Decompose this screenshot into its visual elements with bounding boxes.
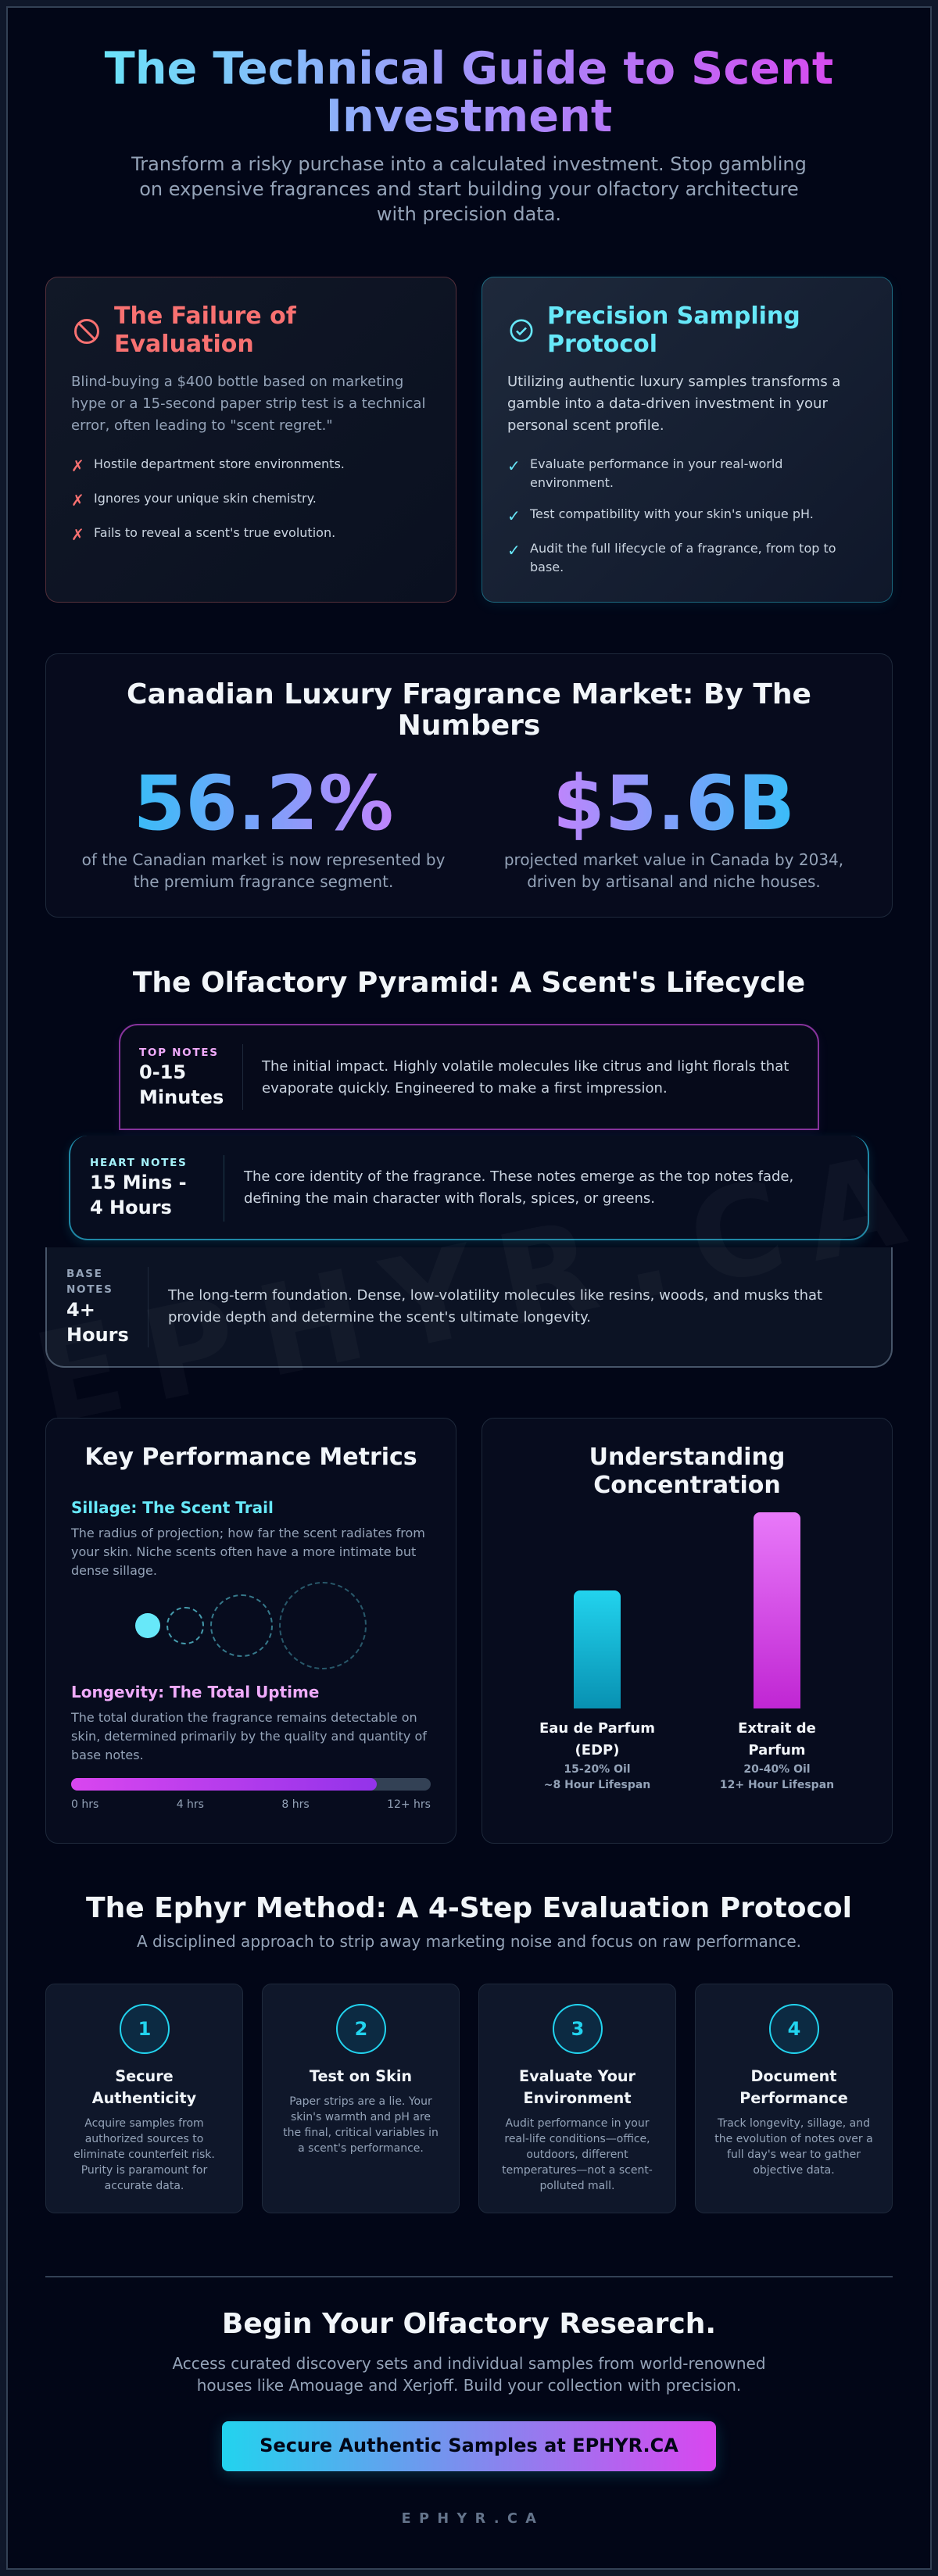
body text: Blind-buying a $400 bottle based on marketing — [71, 374, 403, 390]
stat: $5.6B — [504, 760, 843, 891]
body text: Utilizing authentic luxury samples transforms a — [507, 374, 840, 390]
title: Test on Skin — [310, 2067, 412, 2085]
title — [519, 2067, 635, 2107]
heading — [589, 1444, 785, 1499]
stat: 56.2% — [82, 760, 445, 891]
label: EDP — [539, 1720, 655, 1791]
number: 4 — [788, 2018, 800, 2040]
duration: 4+ — [66, 1299, 95, 1321]
duration — [90, 1172, 187, 1218]
description: skin's warmth and pH are — [291, 2111, 431, 2123]
title: Investment — [326, 89, 612, 142]
number — [769, 2004, 819, 2054]
cta text: Access curated discovery sets and individual samples from world-renowned — [172, 2354, 766, 2373]
description: eliminate counterfeit risk. — [73, 2148, 215, 2161]
sillage text: The radius of projection; how far the scent radiates from — [71, 1526, 425, 1540]
duration: 15 Mins - — [90, 1172, 187, 1193]
description: defining the main character with florals, spices, or greens. — [244, 1190, 655, 1207]
list: benefits: ✓ — [507, 456, 521, 475]
label: EDP: 15-20% Oil — [564, 1763, 631, 1776]
cta button: Secure Authentic Samples at EPHYR.CA — [260, 2435, 678, 2456]
title: The Technical Guide to Scent — [105, 42, 833, 95]
description — [261, 1058, 789, 1097]
step 2 — [262, 1984, 460, 2213]
duration: Hours — [66, 1324, 129, 1346]
body text — [71, 374, 425, 434]
duration: 4 Hours — [90, 1197, 172, 1218]
heading — [547, 302, 800, 358]
sillage text — [70, 1526, 425, 1578]
heading: Understanding — [589, 1444, 785, 1471]
title: Environment — [524, 2089, 632, 2107]
list: benefits: ✓ — [507, 541, 521, 560]
title: Evaluate Your — [519, 2067, 635, 2085]
description — [502, 2117, 653, 2192]
description: evaporate quickly. Engineered to make a first impression. — [262, 1080, 668, 1097]
icon: check circle — [510, 319, 533, 342]
label — [66, 1268, 113, 1296]
list: failures: Fails to reveal a scent's true evolution. — [94, 525, 335, 540]
list: benefits: Test compatibility with your skin's unique pH. — [530, 506, 814, 521]
title: Performance — [739, 2089, 848, 2107]
sillage diagram — [135, 1582, 367, 1669]
panel: understanding concentration — [482, 1418, 893, 1844]
subtitle: on expensive fragrances and start building your olfactory architecture — [139, 178, 799, 200]
list: benefits: ✓ — [507, 506, 521, 525]
subtitle — [131, 153, 807, 225]
heading: Key Performance Metrics — [84, 1444, 417, 1471]
panel: market numbers — [45, 653, 893, 918]
list: failures: ✗ — [71, 456, 84, 475]
stat: 56.2%: 56.2% — [133, 760, 394, 847]
label: Extrait — [720, 1720, 834, 1791]
number — [336, 2004, 386, 2054]
label: Extrait: Parfum — [748, 1742, 806, 1758]
description: the final, critical variables in — [283, 2127, 439, 2139]
label: Extrait: 20-40% Oil — [743, 1763, 811, 1776]
sillage text: dense sillage. — [71, 1563, 157, 1578]
stat: 56.2%: of the Canadian market is now represented by — [82, 850, 445, 869]
description: Track longevity, sillage, and — [718, 2117, 870, 2130]
description: authorized sources to — [85, 2133, 203, 2145]
list: failures: ✗ — [71, 525, 84, 544]
duration — [139, 1061, 224, 1108]
footer brand: EPHYR.CA — [402, 2511, 544, 2527]
description: outdoors, different — [526, 2148, 628, 2161]
description: The initial impact. Highly volatile molecules like citrus and light florals that — [262, 1058, 789, 1075]
description: temperatures—not a scent- — [502, 2164, 653, 2177]
longevity text: The total duration the fragrance remains detectable on — [71, 1710, 417, 1725]
description: objective data. — [753, 2164, 835, 2177]
bar scale: 0 hrs — [71, 1798, 98, 1811]
panel: precision sampling protocol — [482, 277, 893, 603]
pyramid tier: base notes — [45, 1247, 893, 1368]
label: BASE — [66, 1268, 103, 1280]
description — [714, 2117, 873, 2177]
number — [553, 2004, 603, 2054]
stat: $5.6B: driven by artisanal and niche houses. — [527, 872, 821, 891]
icon: prohibited — [74, 319, 99, 344]
duration: Minutes — [139, 1086, 224, 1108]
number: 2 — [355, 2018, 367, 2040]
longevity bar — [71, 1778, 431, 1791]
title: Document — [750, 2067, 836, 2085]
stat: $5.6B: projected market value in Canada by 2034, — [504, 850, 843, 869]
longevity text — [70, 1710, 427, 1762]
label: EDP: ~8 Hour Lifespan — [544, 1779, 650, 1791]
title — [739, 2067, 848, 2107]
label: EDP: (EDP) — [575, 1742, 619, 1758]
list: benefits: environment. — [530, 475, 614, 490]
cta text: houses like Amouage and Xerjoff. Build your collection with precision. — [197, 2376, 741, 2395]
bar scale: 4 hrs — [177, 1798, 204, 1811]
description: Audit performance in your — [506, 2117, 649, 2130]
description: real-life conditions—office, — [504, 2133, 650, 2145]
list: benefits — [507, 456, 836, 574]
subtitle: Transform a risky purchase into a calculated investment. Stop gambling — [131, 153, 807, 175]
list: benefits: Audit the full lifecycle of a fragrance, from top to — [530, 541, 836, 556]
description: accurate data. — [105, 2180, 184, 2192]
description: provide depth and determine the scent's ultimate longevity. — [168, 1309, 591, 1326]
description: polluted mall. — [539, 2180, 614, 2192]
label: Extrait: Extrait de — [738, 1720, 816, 1737]
number: 1 — [138, 2018, 151, 2040]
description: full day's wear to gather — [727, 2148, 861, 2161]
stat: 56.2%: the premium fragrance segment. — [134, 872, 393, 891]
watermark: EPHYR.CA — [23, 1122, 938, 1454]
list: benefits: base. — [530, 560, 564, 574]
cta text — [172, 2354, 766, 2395]
title: Secure — [115, 2067, 174, 2085]
description: Purity is paramount for — [81, 2164, 207, 2177]
number — [120, 2004, 170, 2054]
label: NOTES — [66, 1283, 113, 1296]
bar scale: 12+ hrs — [387, 1798, 431, 1811]
description — [167, 1287, 822, 1326]
description: Paper strips are a lie. Your — [289, 2095, 432, 2108]
heading: Canadian Luxury Fragrance Market: By The — [127, 678, 811, 710]
cta button — [222, 2421, 716, 2471]
list: benefits: Evaluate performance in your real-world — [530, 456, 782, 471]
number: 3 — [571, 2018, 584, 2040]
title: Authenticity — [92, 2089, 196, 2107]
sillage heading: Sillage: The Scent Trail — [71, 1498, 274, 1517]
step 4 — [695, 1984, 893, 2213]
cta heading: Begin Your Olfactory Research. — [222, 2308, 716, 2340]
longevity text: base notes. — [71, 1748, 144, 1762]
title — [78, 45, 860, 140]
panel: key performance metrics — [45, 1418, 456, 1844]
heading — [127, 678, 811, 742]
duration — [66, 1299, 129, 1346]
heading: Evaluation — [114, 331, 254, 358]
pyramid tier: heart notes — [69, 1136, 869, 1240]
heading: The Failure of — [114, 302, 296, 330]
bar: EDP — [574, 1590, 621, 1708]
description — [73, 2117, 215, 2192]
heading: olfactory pyramid: The Olfactory Pyramid: A Scent's Lifecycle — [133, 967, 805, 999]
body text: error, often leading to "scent regret." — [71, 417, 333, 434]
duration: 0-15 — [139, 1061, 186, 1083]
pyramid tier: top notes — [119, 1024, 819, 1130]
method subtitle: A disciplined approach to strip away marketing noise and focus on raw performance. — [137, 1932, 801, 1951]
description — [283, 2095, 439, 2155]
title — [92, 2067, 196, 2107]
description: The core identity of the fragrance. These notes emerge as the top notes fade, — [244, 1168, 793, 1185]
body text: hype or a 15-second paper strip test is a technical — [71, 395, 425, 412]
description: The long-term foundation. Dense, low-volatility molecules like resins, woods, and musks that — [168, 1287, 822, 1304]
bar: Extrait — [754, 1512, 800, 1708]
longevity heading: Longevity: The Total Uptime — [71, 1683, 319, 1701]
description: the evolution of notes over a — [714, 2133, 873, 2145]
description: Acquire samples from — [84, 2117, 204, 2130]
label: Extrait: 12+ Hour Lifespan — [720, 1779, 834, 1791]
body text — [507, 374, 840, 434]
label: HEART NOTES — [90, 1157, 187, 1169]
heading: ephyr method: The Ephyr Method: A 4-Step Evaluation Protocol — [86, 1892, 852, 1924]
step 3 — [478, 1984, 676, 2213]
description: a scent's performance. — [298, 2142, 424, 2155]
heading — [114, 302, 297, 358]
panel: failure of evaluation — [45, 277, 456, 603]
heading: Numbers — [398, 710, 540, 742]
heading: Precision Sampling — [547, 302, 800, 330]
description — [244, 1168, 793, 1207]
list: failures: Ignores your unique skin chemistry. — [94, 491, 317, 506]
heading: Concentration — [593, 1472, 781, 1499]
step 1 — [45, 1984, 243, 2213]
label: TOP NOTES — [139, 1046, 219, 1059]
bar scale: 8 hrs — [281, 1798, 310, 1811]
longevity text: skin, determined primarily by the quality and quantity of — [71, 1729, 427, 1744]
list: failures: ✗ — [71, 491, 84, 510]
heading: Protocol — [547, 331, 657, 358]
sillage text: your skin. Niche scents often have a more intimate but — [71, 1544, 416, 1559]
subtitle: with precision data. — [377, 203, 561, 225]
list: failures — [71, 456, 345, 544]
stat: $5.6B: $5.6B — [553, 760, 795, 847]
list: failures: Hostile department store environments. — [94, 456, 345, 471]
body text: gamble into a data-driven investment in your — [507, 395, 828, 412]
body text: personal scent profile. — [507, 417, 664, 434]
label: EDP: Eau de Parfum — [539, 1720, 655, 1737]
bar scale — [71, 1798, 431, 1811]
